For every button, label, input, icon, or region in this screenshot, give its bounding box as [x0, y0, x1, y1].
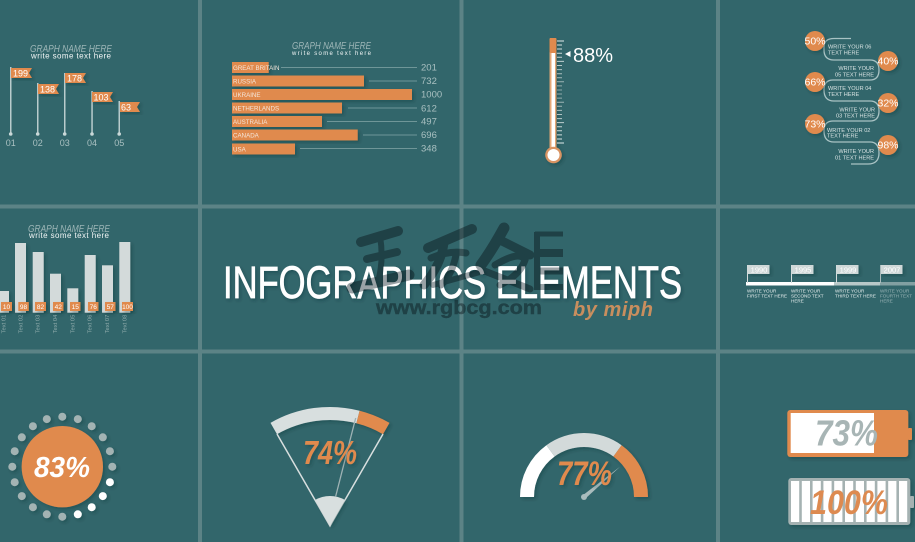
bar: Australia 497: [232, 116, 437, 128]
bar: Netherlands 612: NETHERLANDS: [233, 106, 279, 112]
flag 02 value 138: 02: [33, 138, 43, 148]
milestone 1995: [791, 265, 824, 304]
flag 05 value 63: 63: [121, 102, 131, 112]
item 32%: [836, 93, 899, 120]
column axis labels: Text 08: [123, 315, 129, 333]
item 32%: 32%: [877, 98, 899, 110]
battery value: 73%: [815, 412, 878, 454]
central disc: [22, 426, 103, 507]
item 50%: 50%: [804, 36, 826, 48]
column value tags: 76: [90, 304, 97, 311]
column value tags: 42: [55, 304, 62, 311]
bar: Great Britain 201: [232, 62, 437, 74]
flag 01 value 199: 199: [13, 68, 28, 78]
column axis labels: Text 06: [87, 315, 93, 333]
milestone 2007: [880, 265, 912, 304]
flag 05 value 63: 05: [114, 138, 124, 148]
item 40%: WRITE YOUR: [838, 66, 874, 72]
item 73%: 73%: [804, 118, 826, 130]
milestone 1999: THIRD TEXT HERE: [835, 294, 876, 298]
fan gauge needle: [336, 418, 356, 497]
item 98%: 01 TEXT HERE: [835, 156, 874, 162]
bar chart heading: GRAPH NAME HERE: [292, 40, 372, 52]
item 40%: 05 TEXT HERE: [835, 72, 874, 78]
semicircle gauge segments: [520, 433, 648, 497]
flag 03 value 178: 03: [60, 138, 70, 148]
bar: USA 348: USA: [233, 146, 247, 154]
item 50%: [804, 31, 871, 56]
milestone 1990: WRITE YOUR: [747, 288, 777, 294]
byline: by miph: [573, 299, 653, 321]
bar: Australia 497: 497: [421, 116, 437, 128]
panel: semicircle gauge 77%: [520, 433, 648, 500]
column value tags: 57: [107, 304, 114, 311]
milestone 1995: 1995: [795, 266, 811, 274]
column axis labels: Text 02: [19, 315, 25, 333]
bar: Netherlands 612: 612: [421, 104, 437, 114]
milestone 1995: WRITE YOUR: [791, 288, 821, 294]
panel: battery 100%: [788, 478, 914, 525]
column chart heading: GRAPH NAME HERE: [28, 223, 111, 235]
item 50%: WRITE YOUR 06: [828, 44, 871, 50]
panel: fan gauge 74%: [270, 407, 390, 526]
column bars: [0, 242, 130, 313]
semicircle gauge needle: [581, 467, 620, 500]
column axis labels: Text 03: [36, 315, 42, 333]
flag 03 value 178: 178: [67, 74, 82, 84]
bar: Russia 732: 732: [421, 76, 437, 87]
column chart subheading: write some text here: [28, 231, 110, 240]
item 66%: 66%: [804, 76, 826, 88]
item 98%: [835, 135, 899, 162]
bar: Netherlands 612: [232, 102, 437, 114]
item 40%: [835, 51, 899, 78]
milestone 1995: SECOND TEXT: [791, 294, 824, 298]
timeline bar: [746, 282, 915, 286]
item 73%: WRITE YOUR 02: [827, 128, 870, 134]
bar: USA 348: 348: [421, 144, 437, 154]
bar: Ukraine 1000: UKRAINE: [233, 92, 261, 99]
milestone 1999: [835, 265, 876, 298]
watermark url: www.rgbcg.com: [375, 298, 542, 319]
flag 05 value 63: [114, 101, 140, 148]
battery body grey: [788, 478, 914, 525]
flag 04 value 103: 103: [94, 92, 109, 102]
milestone 1990: FIRST TEXT HERE: [747, 294, 787, 298]
milestone 2007: 2007: [884, 266, 900, 274]
thermometer tube and bulb: [545, 38, 562, 163]
thermometer pointer: [565, 51, 570, 57]
item 32%: WRITE YOUR: [839, 108, 875, 114]
battery charge level: [791, 413, 874, 453]
panel: winding percent list: [804, 31, 899, 164]
item 66%: TEXT HERE: [828, 92, 860, 98]
column value tags: [1, 302, 133, 311]
flag 02 value 138: 138: [40, 84, 55, 94]
milestone 2007: HERE: [880, 298, 893, 304]
bar: USA 348: [232, 144, 437, 154]
flag 01 value 199: [6, 67, 32, 148]
fan gauge side lines: [277, 434, 383, 526]
panel: horizontal bar chart: [232, 40, 442, 154]
item 66%: [804, 72, 871, 98]
column value tags: 98: [20, 304, 27, 311]
column value tags: 15: [72, 304, 79, 311]
flag 03 value 178: [60, 73, 86, 148]
item 32%: 03 TEXT HERE: [836, 114, 875, 120]
battery value: 100%: [810, 484, 888, 522]
main title: INFOGRAPHICS ELEMENTS: [223, 257, 682, 308]
flag 04 value 103: [87, 91, 113, 148]
item 50%: TEXT HERE: [828, 50, 860, 56]
bar chart subheading: write some text here: [291, 51, 372, 57]
semicircle gauge value: 77%: [557, 455, 612, 493]
panel: battery 73%: [787, 410, 912, 457]
flag chart heading: GRAPH NAME HERE: [30, 43, 113, 55]
column axis labels: Text 07: [105, 315, 111, 333]
column value tags: 100: [122, 304, 133, 311]
bar: Ukraine 1000: [232, 89, 442, 100]
bar: Ukraine 1000: 1000: [421, 90, 442, 100]
item 40%: 40%: [877, 56, 899, 68]
thermometer scale ticks: [557, 41, 564, 143]
bar: Great Britain 201: 201: [421, 62, 437, 74]
bar: Australia 497: AUSTRALIA: [233, 119, 268, 126]
milestone 1999: WRITE YOUR: [835, 288, 865, 294]
column axis labels: [2, 314, 129, 333]
thermometer value: 88%: [573, 45, 613, 67]
milestone 1990: [747, 265, 787, 298]
milestone 2007: FOURTH TEXT: [880, 294, 912, 298]
column axis labels: Text 05: [71, 315, 77, 333]
column value tags: 10: [3, 304, 10, 311]
column axis labels: Text 04: [53, 314, 59, 333]
milestone 1995: HERE: [791, 298, 804, 304]
winding connector line: [824, 38, 879, 164]
bar: Russia 732: RUSSIA: [233, 78, 257, 86]
flag 02 value 138: [33, 83, 59, 148]
fan gauge value: 74%: [303, 434, 357, 471]
bar: Canada 696: [232, 130, 437, 141]
bar: Great Britain 201: GREAT BRITAIN: [233, 65, 279, 72]
item 73%: TEXT HERE: [827, 134, 859, 140]
item 98%: WRITE YOUR: [838, 149, 874, 155]
fan gauge arc: [270, 407, 390, 434]
milestone 1990: 1990: [751, 266, 767, 274]
flag 01 value 199: 01: [6, 138, 16, 148]
battery body orange: [787, 410, 912, 457]
ring of progress dots: [8, 413, 116, 521]
battery charge cells: [791, 481, 907, 522]
bar: Canada 696: CANADA: [233, 132, 260, 140]
bar: Russia 732: [232, 76, 437, 87]
ring value: 83%: [34, 452, 90, 484]
panel: timeline: [746, 265, 915, 304]
fan gauge base wedge: [315, 496, 345, 526]
item 73%: [804, 114, 870, 140]
bar: Canada 696: 696: [421, 130, 437, 141]
watermark logo mark: [352, 228, 563, 290]
flag 04 value 103: 04: [87, 138, 97, 148]
flag chart subheading: write some text here: [30, 52, 112, 60]
panel: thermometer: [545, 38, 613, 163]
item 98%: 98%: [877, 140, 899, 152]
panel: dotted ring 83%: [8, 413, 116, 521]
panel: column chart: [0, 223, 133, 333]
milestone 1999: 1999: [840, 266, 856, 274]
column value tags: 82: [37, 304, 44, 311]
milestone 2007: WRITE YOUR: [880, 288, 910, 294]
item 66%: WRITE YOUR 04: [828, 86, 871, 92]
panel: flag chart: [6, 43, 140, 148]
column axis labels: Text 01: [2, 315, 8, 333]
